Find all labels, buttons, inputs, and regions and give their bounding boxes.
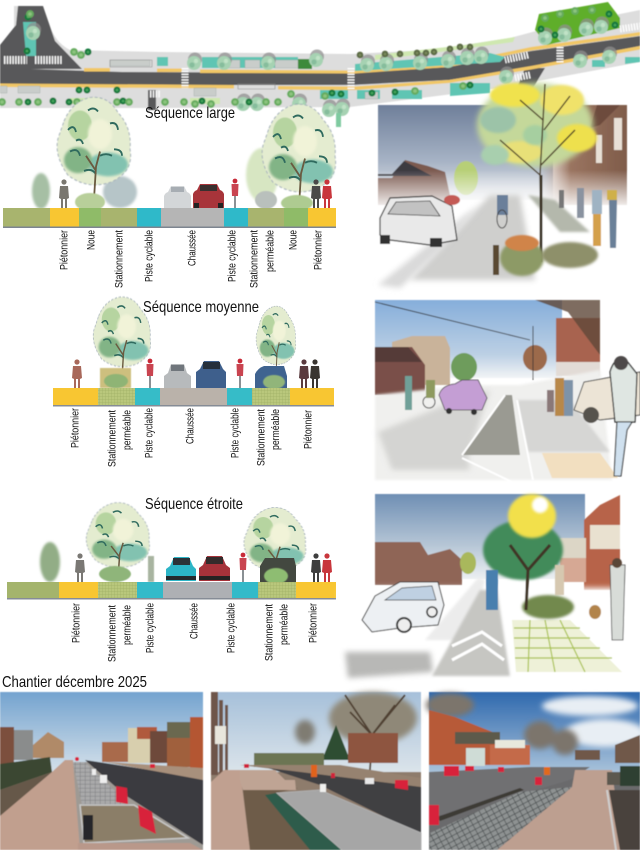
- labels: narrow sequence: Stationnement: [106, 605, 118, 662]
- sketch: red car far: [444, 195, 460, 205]
- sketch: parked car right: [574, 372, 640, 420]
- labels: large sequence: Piste cyclable: [144, 230, 156, 282]
- photo: evergreen and brick house: [322, 725, 350, 760]
- labels: large sequence: Piétonnier: [312, 230, 324, 270]
- plan: sidewalks: [0, 6, 640, 108]
- photo: pink path: [0, 760, 80, 850]
- sketch: sky: [375, 300, 562, 378]
- sketch: main tree: [477, 83, 597, 262]
- car: white: [164, 186, 191, 208]
- photo: shop building: [429, 710, 530, 766]
- plan: side streets: [148, 68, 545, 110]
- photo: ground right of road: [105, 762, 203, 780]
- section: medium sequence: [53, 297, 334, 467]
- photo: buildings left: [0, 727, 64, 765]
- photo: pink path: [211, 770, 250, 850]
- plan: teal parking strips: [23, 22, 640, 99]
- plan: pale green verges: [70, 37, 515, 104]
- labels: narrow sequence: Piétonnier: [308, 603, 320, 643]
- sketch: pale grey road: [378, 205, 480, 288]
- plan: yellow cycle tracks: [0, 32, 640, 90]
- sketch: pole and wires: [375, 302, 533, 380]
- vegetation and vehicles: narrow sequence: [40, 503, 332, 584]
- plan: street overview: [0, 2, 640, 127]
- sketch: asphalt wash: [345, 652, 433, 678]
- sketch: brick terrace: [540, 105, 627, 235]
- sketch: planted median: [462, 395, 520, 455]
- photo: ground backing: [211, 765, 421, 850]
- plan: tree base below road: [336, 113, 341, 127]
- car: red: [199, 556, 230, 581]
- photo: ground backing: [0, 760, 203, 850]
- labels: narrow sequence: Piste cyclable: [226, 603, 238, 653]
- car: red: [193, 184, 224, 209]
- photo: site view three: [426, 692, 640, 850]
- labels: narrow sequence: Piste cyclable: [144, 603, 156, 653]
- labels: large sequence: Noue: [86, 230, 98, 250]
- labels: large sequence: Noue: [288, 230, 300, 250]
- photo: building and poles left: [211, 692, 228, 775]
- photo: red barriers: [75, 757, 156, 834]
- section: large sequence: [3, 97, 336, 288]
- illustration: large sequence street sketch: [378, 83, 640, 292]
- sketch: sky: [375, 494, 585, 579]
- sketch: kerb line: [462, 395, 533, 482]
- photo: houses right: [575, 735, 640, 763]
- sketch: background tree: [460, 552, 476, 574]
- labels: medium sequence: Piste cyclable: [144, 408, 156, 458]
- photo: soil: [0, 772, 52, 816]
- photo: hedge: [0, 757, 52, 790]
- sketch: group of pedestrians: [547, 378, 573, 416]
- heading: Séquence étroite: Séquence étroite: [145, 496, 243, 513]
- photo: paved strip: [277, 790, 421, 850]
- labels: medium sequence: Chaussée: [184, 408, 196, 444]
- labels: large sequence: [58, 230, 324, 288]
- photo: bare trees: [295, 692, 417, 744]
- labels: large sequence: Stationnement: [114, 230, 126, 288]
- sketch: cyclist: [486, 570, 498, 610]
- labels: narrow sequence: Piétonnier: [70, 603, 82, 643]
- photo: sky: [0, 692, 203, 772]
- labels: medium sequence: perméable: [270, 409, 282, 450]
- car: blue: [196, 361, 226, 388]
- sketch: pale road: [425, 578, 485, 640]
- sketch: flowers and bushes: [493, 235, 598, 276]
- sketch: background tree: [454, 161, 478, 195]
- sketch: background trees: [451, 353, 477, 381]
- sketch: fade ground: [378, 170, 628, 210]
- plan: parking bays: [0, 60, 378, 99]
- photo: sky: [211, 692, 421, 772]
- photo: paved strip: [73, 762, 130, 805]
- car: teal: [166, 557, 196, 581]
- photo: green grate: [265, 793, 342, 850]
- labels: large sequence: Chaussée: [186, 230, 198, 266]
- section: narrow sequence: [7, 496, 336, 662]
- labels: narrow sequence: [70, 603, 320, 662]
- sketch: planted median: [528, 195, 590, 232]
- photo: excavation: [80, 805, 188, 843]
- sketch: green paved parking: [512, 620, 622, 672]
- cross-section bar: narrow sequence: [7, 582, 336, 600]
- sketch: house left: [378, 160, 452, 205]
- heading: Séquence moyenne: Séquence moyenne: [143, 299, 259, 316]
- photo: road: [429, 767, 590, 815]
- heading: Séquence large: Séquence large: [145, 105, 235, 122]
- photo: bare trees: [426, 693, 578, 755]
- sketch: bare tree top right: [535, 300, 600, 355]
- sketch: ochre crossing: [542, 453, 618, 478]
- sketch: car: [380, 196, 457, 247]
- sketch: sky: [378, 105, 553, 200]
- vegetation and vehicles: medium sequence: [72, 297, 320, 389]
- vegetation and vehicles: large sequence: [32, 97, 336, 211]
- plan: strip left side of junction: [0, 6, 82, 69]
- sketch: ground: [375, 370, 612, 480]
- labels: narrow sequence: perméable: [122, 605, 134, 645]
- heading: Chantier décembre 2025: Chantier décembre 2025: [2, 674, 147, 691]
- sketch: gravel cycle strip: [432, 590, 510, 676]
- photo: verge far: [240, 765, 421, 790]
- sketch: houses left: [375, 542, 462, 585]
- sketch: houses left: [375, 336, 450, 395]
- sketch: cyclist: [497, 195, 508, 228]
- labels: large sequence: Piste cyclable: [226, 230, 238, 282]
- sketch: pedestrians: [555, 558, 625, 640]
- labels: large sequence: Stationnement: [248, 230, 260, 288]
- photo: pink ground foreground: [78, 843, 203, 850]
- labels: medium sequence: Piétonnier: [302, 410, 314, 449]
- photo: ground backing: [429, 765, 640, 850]
- photo: asphalt: [268, 768, 421, 835]
- sketch: cobbled strip: [410, 195, 535, 280]
- sketch: ground wash: [340, 588, 640, 680]
- photo: road sign: [215, 726, 226, 744]
- labels: medium sequence: Piste cyclable: [230, 408, 242, 458]
- photo: clouds: [542, 696, 640, 747]
- sketch: residence right: [560, 495, 620, 590]
- labels: large sequence: Piétonnier: [58, 230, 70, 270]
- plan: carriageway: [0, 36, 640, 85]
- photo: sky: [429, 692, 640, 772]
- sketch: lilac car: [439, 380, 487, 415]
- sketch: main tree: [483, 494, 563, 610]
- sketch: planting under tree: [522, 595, 574, 619]
- photo: tyres: [83, 815, 93, 840]
- photo: workers and barriers: [244, 764, 408, 792]
- photo: soil and small paved zones: [243, 788, 310, 850]
- photo: dark joint on road edge: [437, 788, 524, 821]
- sketch: cyclist: [423, 380, 435, 408]
- cross-section bar: large sequence: [3, 208, 336, 228]
- car: grey: [164, 364, 191, 388]
- sketch: right sidewalk: [517, 400, 610, 452]
- sketch: brick buildings right: [556, 318, 600, 366]
- sketch: pedestrians: [559, 188, 617, 248]
- photo: white blocks: [92, 769, 107, 783]
- photo: asphalt: [85, 760, 203, 845]
- plan: green park: [535, 2, 620, 45]
- plan: crosswalks: [4, 26, 640, 94]
- illustration: narrow sequence street sketch: [340, 494, 640, 680]
- photo: pink path: [497, 770, 622, 850]
- labels: medium sequence: Stationnement: [256, 409, 268, 466]
- photo: site view two: [211, 692, 421, 850]
- photo: road shoulder: [73, 762, 203, 850]
- photo: red barriers: [429, 766, 550, 825]
- labels: medium sequence: [70, 408, 314, 467]
- plan: bus stops: [110, 60, 275, 89]
- labels: narrow sequence: Stationnement: [264, 604, 276, 661]
- photo: buildings right: [102, 717, 203, 768]
- labels: narrow sequence: Chaussée: [188, 603, 200, 639]
- labels: medium sequence: Stationnement: [106, 410, 118, 467]
- plan: central dark planting: [298, 59, 312, 69]
- sketch: road dark wash: [378, 390, 490, 470]
- labels: large sequence: perméable: [264, 230, 276, 272]
- sketch: chevrons: [452, 632, 504, 660]
- illustration: medium sequence street sketch: [375, 300, 640, 482]
- cross-section bar: medium sequence: [53, 388, 334, 406]
- labels: medium sequence: perméable: [122, 410, 134, 450]
- photo: site view one: [0, 692, 203, 850]
- photo: paved strip: [429, 787, 572, 850]
- photo: right soil and hedge: [609, 790, 640, 850]
- plan: large trees: [26, 16, 617, 117]
- sketch: car: [362, 582, 444, 632]
- sketch: foreground pedestrian: [610, 356, 637, 476]
- plan: small green trees: [0, 6, 619, 108]
- sketch: person left: [405, 376, 412, 410]
- labels: medium sequence: Piétonnier: [70, 408, 82, 448]
- labels: narrow sequence: perméable: [278, 604, 290, 645]
